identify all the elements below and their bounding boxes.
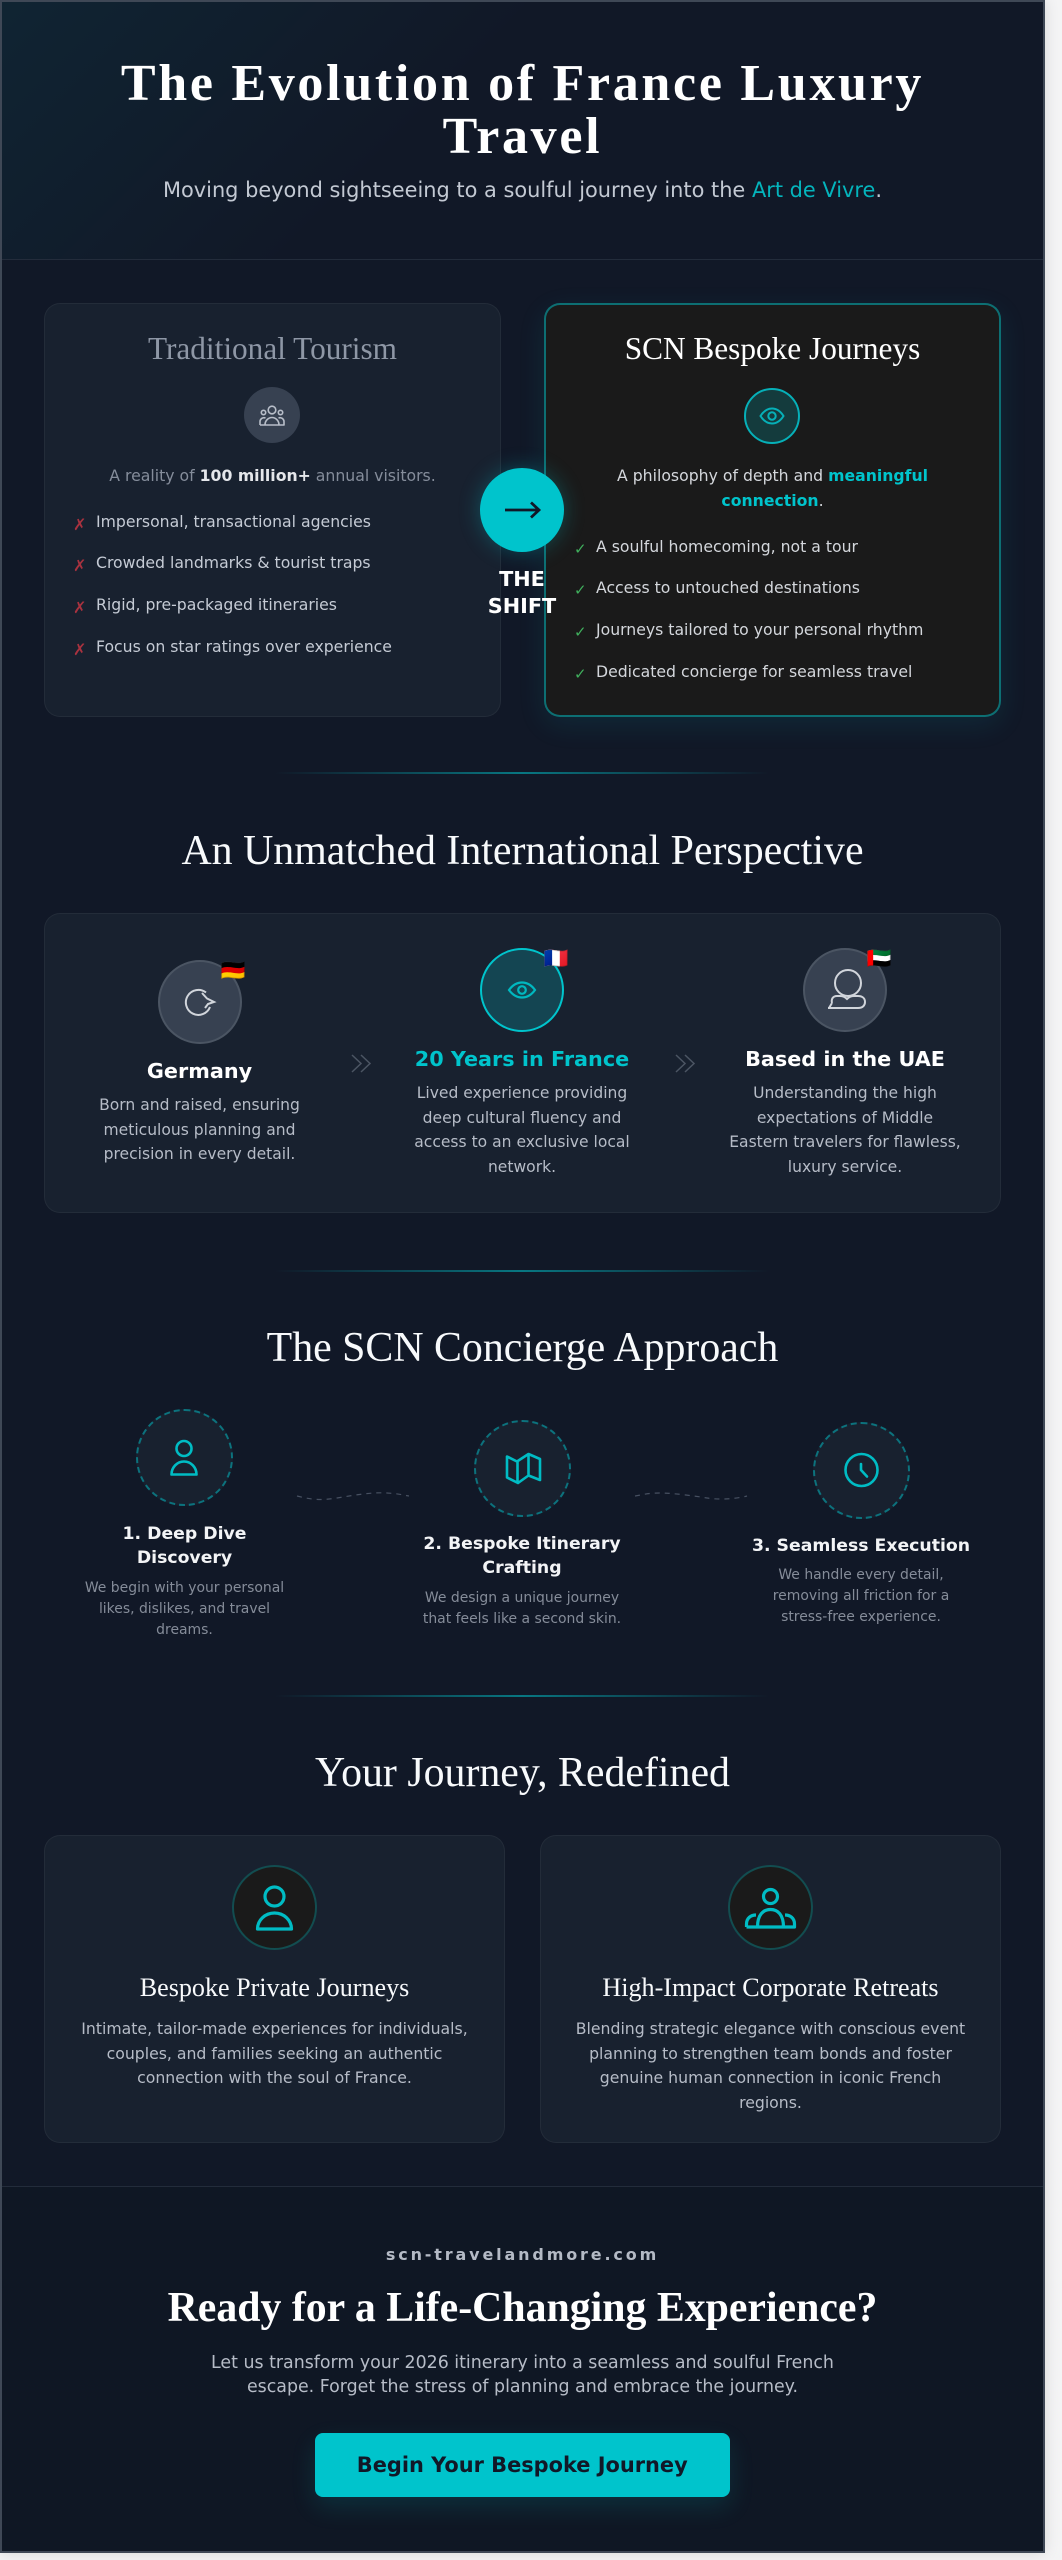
chevrons bbox=[676, 1054, 695, 1072]
cta text: escape. Forget the stress of planning and embrace the journey. bbox=[247, 2377, 798, 2397]
description: france: access to an exclusive local bbox=[414, 1133, 630, 1151]
icon: group bbox=[728, 1864, 813, 1950]
text: visitors: A reality of 100 million+ annual visitors. bbox=[109, 466, 436, 485]
description: germany: precision in every detail. bbox=[104, 1145, 295, 1163]
card text: genuine human connection in iconic French bbox=[600, 2068, 941, 2087]
name: france: 20 Years in France bbox=[415, 1047, 629, 1071]
flag: germany: 🇩🇪 bbox=[220, 958, 245, 982]
description: france: deep cultural fluency and bbox=[423, 1109, 621, 1127]
list item 1: ✗ bbox=[73, 515, 86, 534]
step description bbox=[773, 1566, 949, 1624]
list item 4: Focus on star ratings over experience bbox=[96, 637, 392, 656]
list item 3: ✗ bbox=[73, 598, 86, 617]
heading: international perspective: An Unmatched International Perspective bbox=[181, 828, 864, 874]
description: france bbox=[414, 1084, 630, 1176]
list item 4: ✗ bbox=[73, 640, 86, 659]
card: private journeys bbox=[44, 1835, 505, 2143]
card title: High-Impact Corporate Retreats bbox=[602, 1973, 939, 2002]
connector 2 bbox=[635, 1492, 747, 1500]
list item 2: Crowded landmarks & tourist traps bbox=[96, 553, 371, 572]
button: Begin Your Bespoke Journey bbox=[357, 2453, 688, 2477]
label: the shift: SHIFT bbox=[488, 594, 556, 618]
icon: crowd bbox=[244, 387, 300, 443]
subtitle: Moving beyond sightseeing to a soulful journey into the Art de Vivre. bbox=[163, 178, 882, 202]
card text bbox=[81, 2019, 468, 2087]
cta text bbox=[211, 2352, 834, 2397]
connector 1 bbox=[297, 1492, 409, 1500]
flag: uae: 🇦🇪 bbox=[866, 946, 891, 970]
call to action bbox=[0, 2186, 1045, 2553]
description: france: Lived experience providing bbox=[417, 1084, 627, 1102]
name: uae: Based in the UAE bbox=[745, 1047, 945, 1071]
header bbox=[0, 0, 1045, 260]
card title: Bespoke Private Journeys bbox=[140, 1973, 409, 2002]
list item 3: Rigid, pre-packaged itineraries bbox=[96, 595, 337, 614]
heading: traditional tourism: Traditional Tourism bbox=[148, 330, 397, 366]
step description: We begin with your personal bbox=[85, 1580, 284, 1596]
step title: 3. Seamless Execution bbox=[752, 1536, 970, 1556]
icon: person bbox=[136, 1409, 233, 1506]
the shift badge bbox=[472, 460, 572, 618]
heading: your journey redefined: Your Journey, Redefined bbox=[315, 1750, 730, 1796]
step description: that feels like a second skin. bbox=[423, 1610, 621, 1626]
description: uae bbox=[729, 1084, 961, 1176]
icon: map bbox=[474, 1420, 570, 1517]
card text: Blending strategic elegance with conscious event bbox=[576, 2019, 965, 2038]
step description: dreams. bbox=[156, 1622, 213, 1638]
card text: couples, and families seeking an authentic bbox=[107, 2044, 442, 2063]
text: philosophy: connection. bbox=[721, 491, 824, 510]
heading: scn bespoke journeys: SCN Bespoke Journeys bbox=[625, 331, 920, 366]
card text: Intimate, tailor-made experiences for individuals, bbox=[81, 2019, 468, 2038]
icon: eye bbox=[744, 388, 800, 444]
description: uae: Understanding the high bbox=[753, 1084, 937, 1102]
list item 1: A soulful homecoming, not a tour bbox=[596, 537, 858, 556]
step description: removing all friction for a bbox=[773, 1588, 949, 1604]
step title: Discovery bbox=[137, 1548, 232, 1568]
label: the shift: THE bbox=[499, 567, 545, 591]
title: Travel bbox=[443, 108, 602, 164]
card: corporate retreats bbox=[540, 1835, 1001, 2143]
icon: uae circle bbox=[803, 948, 887, 1032]
text: philosophy: A philosophy of depth and meaningful bbox=[617, 466, 928, 485]
title: The Evolution of France Luxury bbox=[121, 55, 924, 112]
text: philosophy bbox=[617, 466, 928, 510]
panel: scn bespoke journeys bbox=[544, 303, 1001, 717]
list item 3: Journeys tailored to your personal rhythm bbox=[596, 620, 923, 639]
description: germany bbox=[99, 1096, 300, 1163]
list: traditional drawbacks bbox=[73, 512, 392, 659]
chevrons bbox=[352, 1054, 371, 1072]
step description: We design a unique journey bbox=[425, 1590, 619, 1606]
card text bbox=[576, 2019, 965, 2112]
step description: We handle every detail, bbox=[778, 1566, 944, 1582]
cta heading: Ready for a Life-Changing Experience? bbox=[168, 2285, 877, 2331]
title bbox=[121, 55, 924, 164]
description: germany: meticulous planning and bbox=[104, 1121, 295, 1139]
card text: connection with the soul of France. bbox=[137, 2068, 412, 2087]
list item 2: Access to untouched destinations bbox=[596, 578, 860, 597]
step 1 bbox=[85, 1409, 284, 1638]
column: france bbox=[414, 946, 630, 1176]
step title: Crafting bbox=[482, 1558, 562, 1578]
list item 2: ✗ bbox=[73, 556, 86, 575]
step description: stress-free experience. bbox=[781, 1608, 941, 1624]
list item 4: ✓ bbox=[574, 665, 587, 683]
label: the shift bbox=[488, 567, 556, 618]
description: uae: Eastern travelers for flawless, bbox=[729, 1133, 961, 1151]
step description: likes, dislikes, and travel bbox=[99, 1601, 270, 1617]
icon: germany circle bbox=[158, 960, 242, 1044]
list item 2: ✓ bbox=[574, 581, 587, 599]
website: scn-travelandmore.com bbox=[386, 2245, 659, 2264]
step description bbox=[85, 1580, 284, 1638]
description: germany: Born and raised, ensuring bbox=[99, 1096, 300, 1114]
list item 1: Impersonal, transactional agencies bbox=[96, 512, 371, 531]
heading: concierge approach: The SCN Concierge Approach bbox=[267, 1325, 778, 1371]
column: germany bbox=[99, 958, 300, 1163]
description: uae: luxury service. bbox=[788, 1158, 902, 1176]
list item 3: ✓ bbox=[574, 623, 587, 641]
card text: regions. bbox=[739, 2093, 802, 2112]
icon: clock bbox=[812, 1422, 910, 1519]
flag: france: 🇫🇷 bbox=[544, 946, 568, 970]
step title bbox=[123, 1524, 246, 1568]
step description bbox=[423, 1590, 621, 1626]
panel: international perspective bbox=[44, 913, 1001, 1213]
list item 1: ✓ bbox=[574, 540, 587, 558]
button bbox=[315, 2433, 730, 2497]
step title: 1. Deep Dive bbox=[123, 1524, 246, 1544]
step 3 bbox=[752, 1422, 970, 1624]
cta text: Let us transform your 2026 itinerary into a seamless and soulful French bbox=[211, 2352, 834, 2372]
name: germany: Germany bbox=[147, 1059, 252, 1083]
icon: person bbox=[232, 1864, 316, 1950]
step title: 2. Bespoke Itinerary bbox=[423, 1534, 621, 1554]
step title bbox=[423, 1534, 621, 1578]
description: uae: expectations of Middle bbox=[757, 1109, 933, 1127]
list item 4: Dedicated concierge for seamless travel bbox=[596, 662, 912, 681]
step 2 bbox=[423, 1420, 621, 1626]
description: france: network. bbox=[488, 1158, 556, 1176]
icon: france circle bbox=[480, 948, 564, 1032]
panel: traditional tourism bbox=[44, 303, 501, 717]
column: uae bbox=[729, 946, 961, 1176]
list: scn benefits bbox=[574, 537, 923, 683]
icon: arrow bbox=[480, 468, 564, 552]
card text: planning to strengthen team bonds and foster bbox=[589, 2044, 952, 2063]
